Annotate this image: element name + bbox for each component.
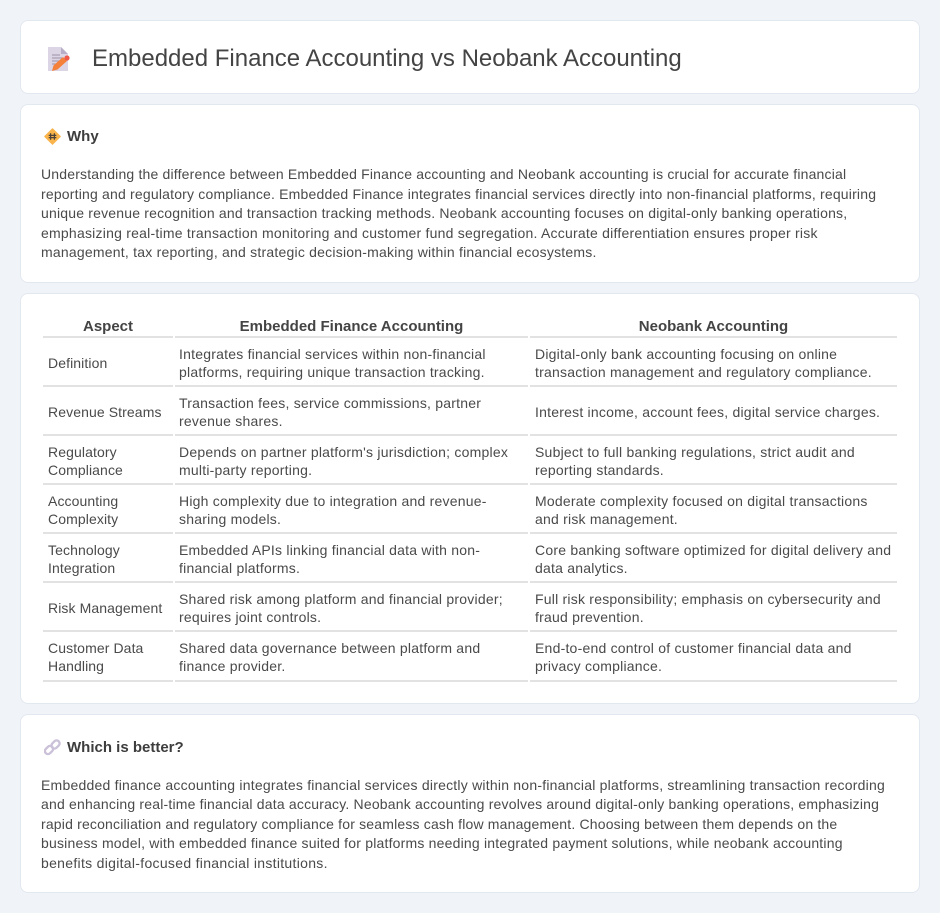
text block: which is better: Embedded finance accounting integrates financial services directly within non-financial platforms, streamlining transaction recording [41,777,885,793]
row: regulatory compliance: multi-party reporting. [179,462,312,478]
row: technology integration: Integration [48,560,115,576]
text block: which is better [41,777,885,871]
text block: why [41,166,876,260]
row: definition: Definition [48,355,107,371]
row: accounting complexity: Moderate complexity focused on digital transactions [535,493,868,509]
row: risk management: Full risk responsibility; emphasis on cybersecurity and [535,591,881,607]
row: risk management: Risk Management [48,600,162,616]
row: accounting complexity: Accounting [48,493,118,509]
row: technology integration: data analytics. [535,560,628,576]
row: accounting complexity: Complexity [48,511,118,527]
row: regulatory compliance: Compliance [48,462,123,478]
row: revenue streams: revenue shares. [179,413,283,429]
row: technology integration: Embedded APIs linking financial data with non- [179,542,480,558]
row: customer data handling: End-to-end control of customer financial data and [535,640,852,656]
row: regulatory compliance: Subject to full banking regulations, strict audit and [535,444,855,460]
panel: why [20,104,920,283]
icon: diamond [44,128,61,145]
row: revenue streams: Transaction fees, service commissions, partner [179,395,481,411]
row: risk management [48,591,881,625]
row: customer data handling [48,640,852,674]
row: technology integration: financial platforms. [179,560,300,576]
row: regulatory compliance [48,444,855,478]
text block: which is better: business model, with embedded finance suited for platforms needing integrated payment solutions, while neobank accounting [41,835,843,851]
icon: document with pencil [48,47,70,71]
text block: which is better: benefits digital-focused financial institutions. [41,855,328,871]
row: accounting complexity: and risk management. [535,511,678,527]
row: customer data handling: Customer Data [48,640,143,656]
text block: why: management, tax reporting, and strategic decision-making within financial ecosystems. [41,244,597,260]
title: Embedded Finance Accounting vs Neobank Accounting [92,45,682,72]
text block: which is better: and enhancing real-time financial data accuracy. Neobank accounting revolves around digital-only banking operations, emphasizing [41,796,879,812]
table header [83,318,788,335]
row: revenue streams: Revenue Streams [48,404,162,420]
panel: which is better [20,714,920,893]
panel: comparison table [20,293,920,704]
row: definition: Integrates financial services within non-financial [179,346,486,362]
row: revenue streams [48,395,880,429]
table header: Embedded Finance Accounting [240,318,463,335]
row: definition: Digital-only bank accounting focusing on online [535,346,837,362]
row: customer data handling: privacy compliance. [535,658,662,674]
row: accounting complexity: High complexity due to integration and revenue- [179,493,487,509]
text block: which is better: rapid reconciliation and regulatory compliance for seamless cash flow management. Choosing between them depends on the [41,816,837,832]
text block: why: emphasizing real-time transaction monitoring and customer fund segregation. Accurate differentiation ensures proper risk [41,225,818,241]
heading: which is better: Which is better? [67,739,184,756]
table header: Neobank Accounting [639,318,788,335]
heading: why: Why [67,128,99,145]
table header: Aspect [83,318,133,335]
row: technology integration: Technology [48,542,120,558]
row: risk management: fraud prevention. [535,609,644,625]
row: accounting complexity: sharing models. [179,511,281,527]
row: revenue streams: Interest income, account fees, digital service charges. [535,404,880,420]
row: regulatory compliance: reporting standards. [535,462,664,478]
row: regulatory compliance: Depends on partner platform's jurisdiction; complex [179,444,508,460]
row: regulatory compliance: Regulatory [48,444,117,460]
text block: why: unique revenue recognition and transaction tracking methods. Neobank accounting focuses on digital-only banking operations, [41,205,847,221]
row: risk management: Shared risk among platform and financial provider; [179,591,503,607]
row: technology integration [48,542,891,576]
row: accounting complexity [48,493,868,527]
row: technology integration: Core banking software optimized for digital delivery and [535,542,891,558]
row: customer data handling: Handling [48,658,104,674]
row: risk management: requires joint controls. [179,609,321,625]
row: customer data handling: Shared data governance between platform and [179,640,480,656]
row: definition: platforms, requiring unique transaction tracking. [179,364,485,380]
comparison table [43,318,897,682]
row: definition [48,346,872,380]
icon: chain link [44,739,61,756]
row: definition: transaction management and regulatory compliance. [535,364,872,380]
text block: why: reporting and regulatory compliance. Embedded Finance integrates financial services directly into non-financial platforms, requiring [41,186,876,202]
row: customer data handling: finance provider. [179,658,285,674]
text block: why: Understanding the difference between Embedded Finance accounting and Neobank accounting is crucial for accurate financial [41,166,846,182]
header panel [20,20,920,94]
